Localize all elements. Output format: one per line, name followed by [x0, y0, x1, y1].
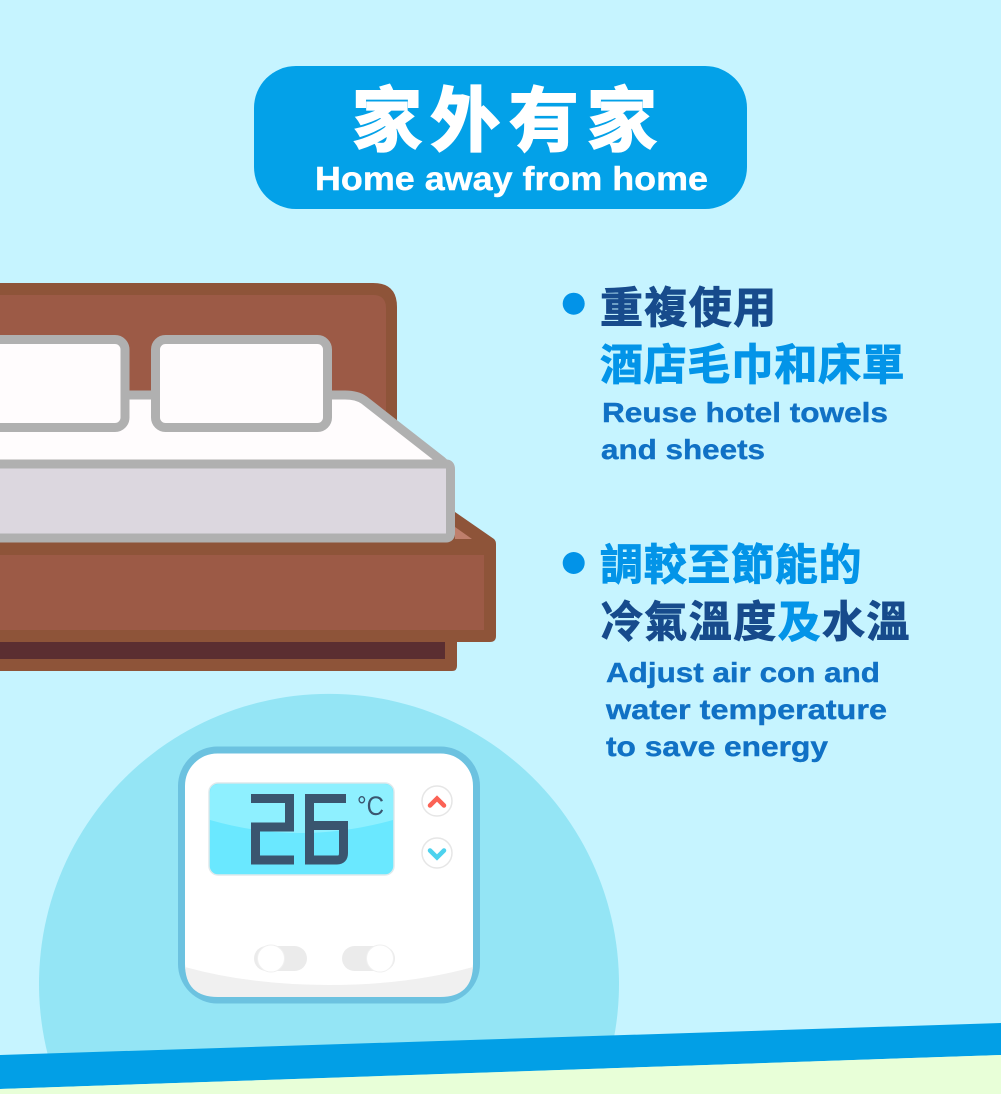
- English text: water temperature: [605, 694, 887, 725]
- thermostat bottom shade: [185, 964, 473, 997]
- toggle right: [342, 945, 395, 972]
- thermostat body: [182, 750, 476, 1000]
- English text: Reuse hotel towels: [602, 397, 888, 428]
- heading line 2: 酒店毛巾和床單: [600, 342, 905, 390]
- English text: to save energy: [606, 731, 828, 762]
- pillow right: [156, 340, 328, 428]
- title: English: Home away from home: [315, 160, 708, 197]
- headboard: [0, 283, 397, 480]
- sheet and mattress: [0, 395, 450, 538]
- bullet point: adjust temperature: [563, 542, 911, 762]
- button down: [422, 838, 452, 868]
- English text: and sheets: [601, 434, 765, 465]
- bullet point: reuse linens: [563, 285, 905, 465]
- pillow left: [0, 340, 125, 428]
- digit 6: [310, 798, 346, 860]
- title: Chinese: 家外有家: [352, 82, 665, 160]
- button up: [422, 786, 452, 816]
- illustration: bed: [0, 283, 496, 671]
- footer ground: [0, 1055, 1001, 1094]
- display screen: [209, 783, 394, 875]
- toggle left: [254, 945, 307, 972]
- heading line 1: 調較至節能的: [600, 542, 862, 590]
- illustration: thermostat: [182, 750, 476, 1000]
- English text: Adjust air con and: [606, 657, 880, 688]
- degree unit: °C: [357, 791, 384, 821]
- digit 2: [251, 798, 294, 860]
- English text: [601, 397, 888, 465]
- title banner: [254, 66, 747, 209]
- footer band: [0, 1023, 1001, 1089]
- English text: [605, 657, 887, 762]
- heading line 1: 重複使用: [600, 285, 778, 333]
- heading line 2: 冷氣溫度及水溫: [600, 599, 911, 647]
- backdrop circle: [39, 694, 619, 1080]
- bed frame: [0, 512, 496, 671]
